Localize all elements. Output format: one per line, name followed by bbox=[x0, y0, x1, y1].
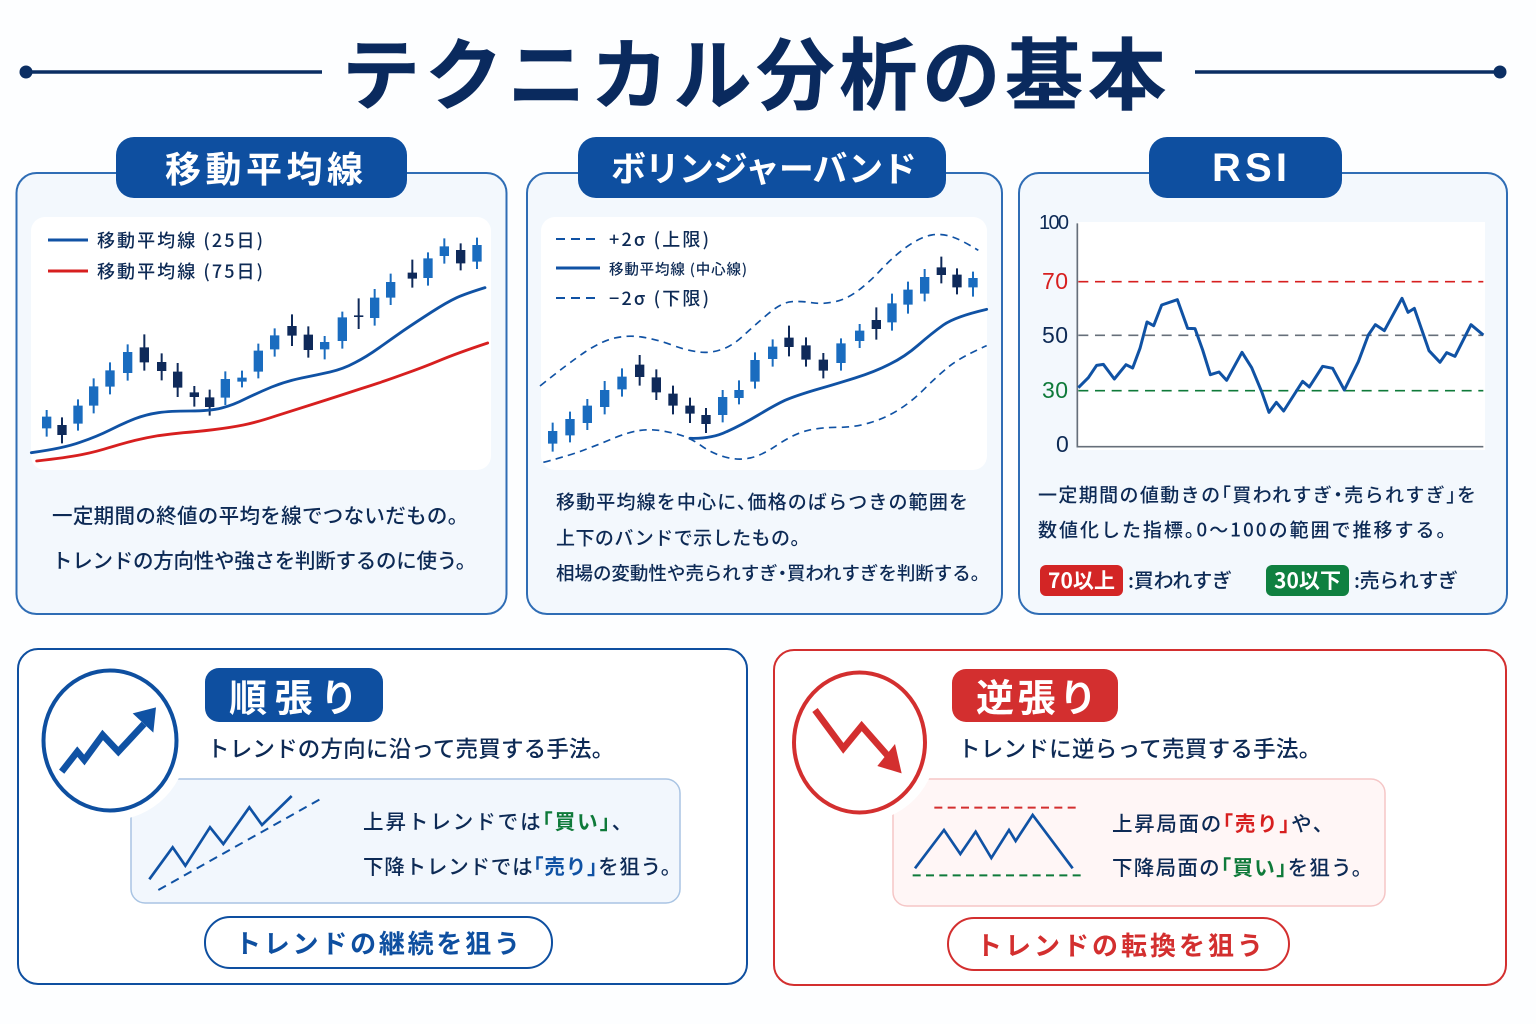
panel: 逆張り bbox=[774, 650, 1506, 985]
legend: 移動平均線 (中心線) bbox=[609, 258, 747, 280]
panel: 移動平均線 bbox=[16, 137, 506, 614]
badge: oversold: 30以下 bbox=[1274, 565, 1341, 595]
text block: 一定期間の値動きの「買われすぎ・売られすぎ」を bbox=[1038, 480, 1476, 508]
text block: 移動平均線を中心に、価格のばらつきの範囲を bbox=[556, 488, 968, 514]
badge: overbought: 70以上 bbox=[1048, 565, 1115, 595]
example box bbox=[782, 662, 1385, 906]
pill: goal bbox=[205, 917, 552, 968]
legend bbox=[556, 226, 747, 311]
mini chart: range bbox=[913, 808, 1081, 875]
heading: ボリンジャーバンド bbox=[578, 137, 946, 198]
legend: 移動平均線 (25日) bbox=[97, 227, 263, 253]
text block: 上下のバンドで示したもの。 bbox=[556, 524, 800, 550]
legend: −2σ (下限) bbox=[609, 285, 709, 311]
badge: overbought bbox=[1040, 564, 1232, 596]
axis labels: 30 bbox=[1042, 377, 1068, 403]
example text: 下降局面の「買い」を狙う。 bbox=[1112, 851, 1362, 881]
heading: 順張り: 順張り bbox=[229, 668, 358, 722]
icon: falling arrow bbox=[794, 672, 925, 812]
legend: +2σ (上限) bbox=[609, 226, 709, 252]
text block: トレンドの方向性や強さを判断するのに使う。 bbox=[52, 544, 466, 574]
heading: 移動平均線 bbox=[116, 137, 407, 198]
text block: 相場の変動性や売られすぎ・買われすぎを判断する。 bbox=[556, 560, 980, 586]
example text bbox=[1112, 807, 1362, 881]
heading: 移動平均線: 移動平均線 bbox=[165, 141, 363, 193]
panel: RSI bbox=[1019, 137, 1507, 614]
axis labels bbox=[1039, 212, 1069, 457]
axis labels: 50 bbox=[1042, 322, 1068, 348]
example text: 下降トレンドでは「売り」を狙う。 bbox=[363, 850, 671, 880]
heading: RSI: RSI bbox=[1212, 146, 1287, 190]
description: トレンドの方向に沿って売買する手法。 bbox=[207, 732, 603, 764]
heading: ボリンジャーバンド: ボリンジャーバンド bbox=[611, 142, 917, 192]
chart: moving averages bbox=[31, 217, 491, 470]
title bbox=[20, 14, 1506, 126]
candlesticks and lines bbox=[31, 238, 488, 461]
candlesticks and bands bbox=[540, 234, 987, 462]
axis labels: 70 bbox=[1042, 268, 1068, 294]
title: テクニカル分析の基本 bbox=[342, 14, 1166, 126]
pill: goal bbox=[948, 918, 1289, 970]
heading: 逆張り: 逆張り bbox=[976, 668, 1097, 722]
panel: 順張り bbox=[18, 649, 747, 984]
panel: ボリンジャーバンド bbox=[527, 137, 1002, 614]
pill: goal: トレンドの転換を狙う bbox=[976, 926, 1263, 963]
legend: 移動平均線 (75日) bbox=[97, 258, 263, 284]
text block: 一定期間の終値の平均を線でつないだもの。 bbox=[52, 499, 458, 529]
pill: goal: トレンドの継続を狙う bbox=[235, 924, 520, 961]
badge: overbought: :買われすぎ bbox=[1128, 564, 1232, 594]
heading: RSI bbox=[1149, 137, 1342, 198]
axis labels: 0 bbox=[1056, 431, 1069, 457]
text block bbox=[52, 499, 466, 574]
icon: rising arrow bbox=[44, 670, 176, 810]
badge: oversold bbox=[1266, 564, 1458, 596]
example box bbox=[32, 660, 680, 903]
example text bbox=[363, 805, 671, 880]
text block: 数値化した指標。0〜100の範囲で推移する。 bbox=[1038, 516, 1446, 542]
description: トレンドに逆らって売買する手法。 bbox=[958, 732, 1310, 764]
badge: oversold: :売られすぎ bbox=[1354, 564, 1458, 594]
line plot bbox=[1077, 223, 1483, 447]
text block bbox=[556, 488, 980, 586]
mini chart: uptrend bbox=[149, 796, 322, 890]
text block bbox=[1038, 480, 1476, 542]
chart: bollinger bands bbox=[540, 217, 987, 470]
axis labels: 100 bbox=[1039, 212, 1069, 234]
chart: RSI bbox=[1039, 212, 1485, 457]
legend bbox=[48, 227, 263, 284]
example text: 上昇局面の「売り」や、 bbox=[1112, 807, 1323, 837]
example text: 上昇トレンドでは「買い」、 bbox=[363, 805, 622, 835]
